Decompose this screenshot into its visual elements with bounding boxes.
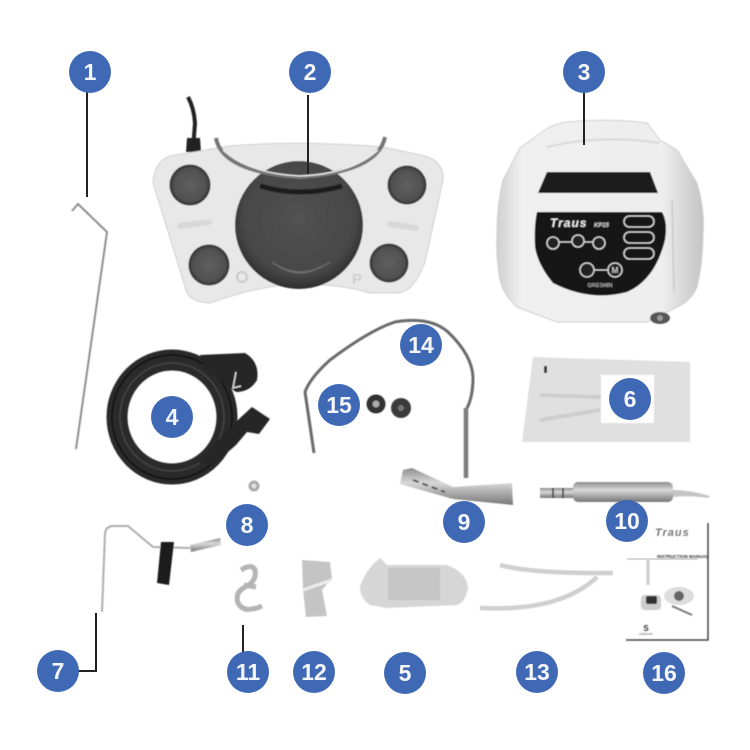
item 16: instruction manual — [626, 523, 709, 640]
item 2: foot pedal — [153, 97, 443, 303]
badge 7: 7 — [52, 658, 64, 684]
badge 10: 10 — [614, 508, 640, 534]
badge 4 — [151, 396, 193, 438]
badge 2: 2 — [304, 59, 316, 85]
badge 15 — [318, 384, 360, 426]
item 4: power cord — [112, 353, 270, 479]
badge 5: 5 — [399, 660, 412, 686]
item 3: control console — [497, 120, 703, 324]
item 6: plastic bag — [522, 357, 690, 442]
item 16: instruction manual: INSTRUCTION MANUAL — [657, 554, 709, 559]
badge 12: 12 — [301, 659, 327, 685]
badge 14 — [400, 324, 442, 366]
badge 13: 13 — [524, 659, 550, 685]
badge 15: 15 — [326, 392, 352, 418]
badge 11: 11 — [236, 659, 260, 685]
badge 8: 8 — [241, 512, 254, 538]
badge 16: 16 — [651, 660, 677, 686]
item 3: control console: KP15 — [594, 223, 610, 229]
badge 13 — [516, 651, 558, 693]
badge 14: 14 — [408, 332, 434, 358]
item 12: clip — [302, 560, 332, 617]
leader lines — [76, 92, 584, 671]
badge 12 — [293, 651, 335, 693]
item 7: wire with clip — [102, 526, 221, 612]
item 15: rings — [366, 394, 411, 418]
badge 5 — [384, 652, 426, 694]
item 11: hook — [237, 566, 262, 609]
badge 9 — [443, 501, 485, 543]
item 3: control console: GRESHIN — [587, 283, 613, 289]
badge 11 — [227, 651, 269, 693]
badge 4: 4 — [166, 404, 179, 430]
item 3: control console: Traus — [550, 216, 587, 230]
item 3: control console: M — [612, 266, 619, 275]
item 2: foot pedal: P — [352, 271, 362, 288]
item 5: tray — [360, 558, 468, 608]
badge 1: 1 — [84, 59, 97, 85]
item 16: instruction manual: S — [643, 624, 649, 633]
item 16: instruction manual: Traus — [655, 527, 690, 539]
badge 1 — [69, 51, 111, 93]
item 9: contra-angle handpiece — [400, 468, 513, 505]
item 1: bent rod — [72, 204, 107, 449]
badge 3 — [563, 51, 605, 93]
item 16: instruction manual: GRESHIN — [639, 632, 653, 636]
badge 3: 3 — [578, 59, 590, 85]
badge 16 — [643, 652, 685, 694]
item 13: tube — [480, 565, 613, 608]
badge 6 — [609, 378, 651, 420]
badge 6: 6 — [624, 386, 636, 412]
item 8: nut — [248, 480, 260, 492]
badge 9: 9 — [458, 509, 470, 535]
item 10: motor — [540, 482, 710, 502]
item 14: curved probe — [305, 320, 473, 478]
badge 2 — [289, 51, 331, 93]
badge 7 — [37, 650, 79, 692]
badge 10 — [606, 500, 648, 542]
badge 8 — [226, 504, 268, 546]
